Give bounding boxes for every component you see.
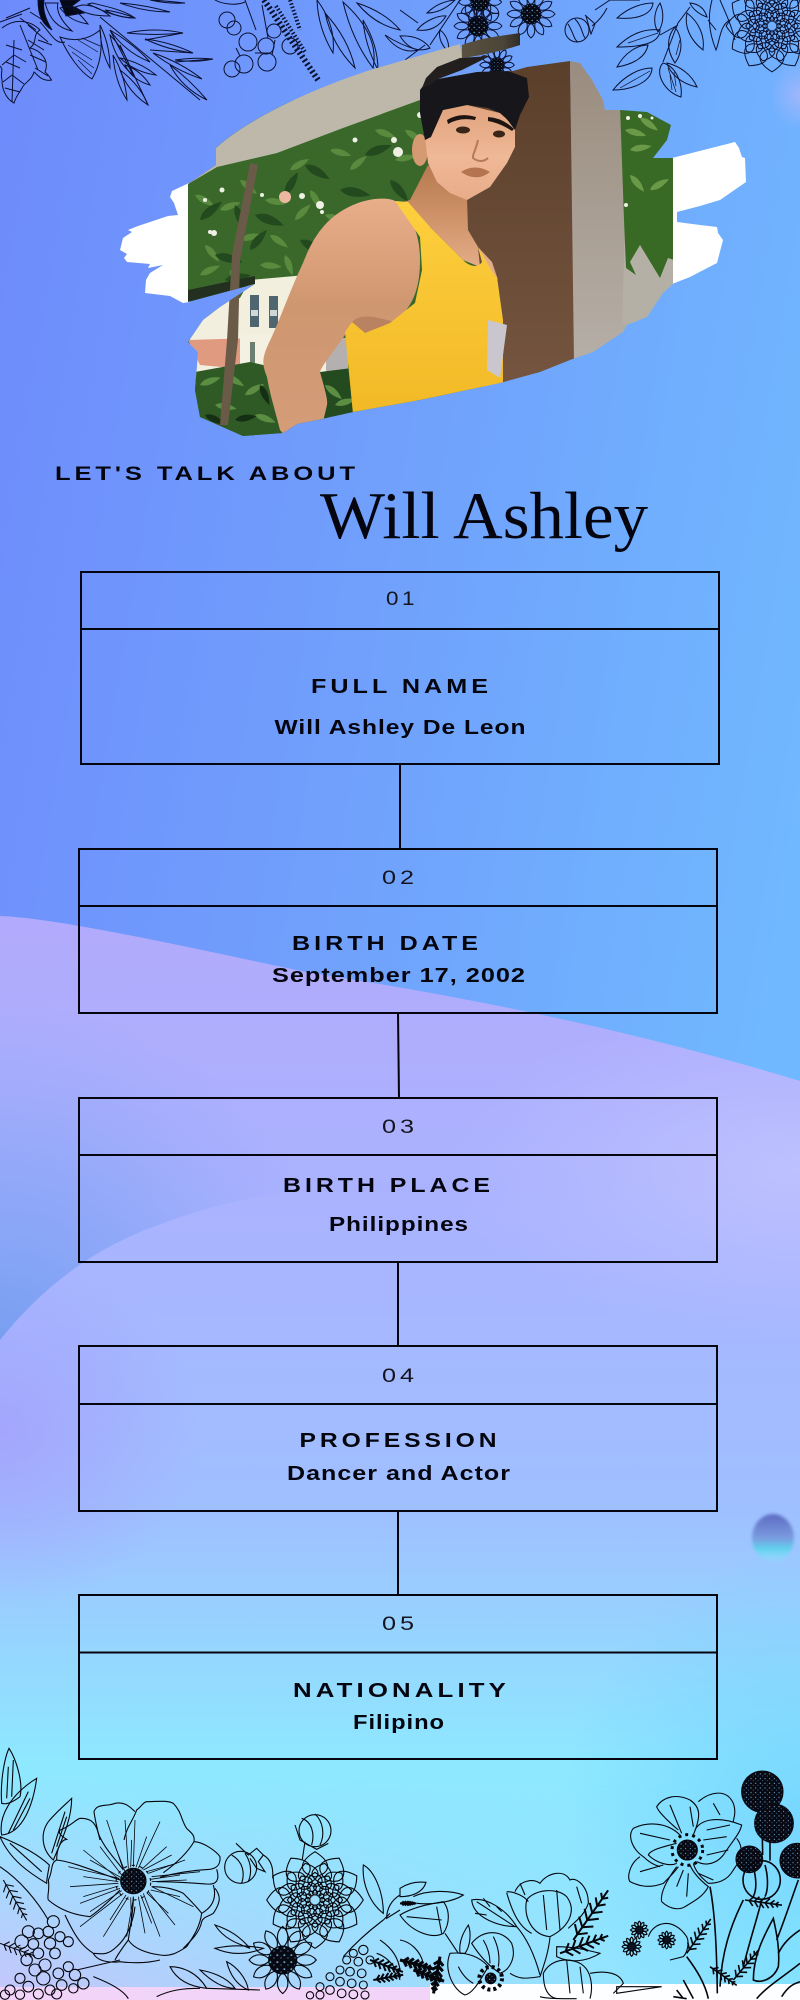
- large anemone flower: [48, 1801, 220, 1963]
- foliage background: [185, 100, 485, 440]
- connector 4: [397, 1511, 399, 1595]
- lobed leaves: [399, 1882, 540, 1994]
- concrete ledge: [188, 38, 470, 184]
- man: yellow tank top: [345, 201, 507, 414]
- left buds and leaves: [0, 1748, 72, 1961]
- middle leaves and sunflowers: [317, 0, 555, 82]
- centre dahlia: [267, 1852, 363, 1948]
- number 02: 02: [382, 868, 418, 889]
- number 05: 05: [382, 1614, 418, 1635]
- small buds: [225, 1814, 331, 1883]
- bottom floral left half: [0, 1748, 405, 1999]
- title: Will Ashley: Will Ashley: [320, 479, 649, 553]
- value full name: Will Ashley De Leon: [274, 717, 526, 739]
- label full name: FULL NAME: [311, 676, 492, 698]
- berries: [215, 0, 318, 80]
- portrait photo in brush stroke: [120, 33, 746, 440]
- heading: let's talk about: LET'S TALK ABOUT: [55, 463, 359, 485]
- value nationality: Filipino: [353, 1712, 445, 1734]
- building: [188, 272, 348, 380]
- panel 4: profession: [79, 1346, 717, 1511]
- value profession: Dancer and Actor: [287, 1463, 511, 1485]
- panel 5: nationality: [79, 1595, 717, 1759]
- top floral line art: [0, 0, 800, 105]
- protea and narrow leaves, top left: [38, 0, 213, 105]
- dahlia top right: [708, 0, 800, 72]
- pompom flowers: [736, 1771, 800, 1878]
- connector 1: [399, 764, 401, 849]
- panel 3: birth place: [79, 1098, 717, 1262]
- white brush strokes: [120, 142, 746, 303]
- lower flower: [448, 1925, 540, 1995]
- panel 2: birth date: [79, 849, 717, 1013]
- panel 1: full name: [81, 572, 719, 764]
- number 01: 01: [386, 589, 418, 610]
- photo content clipped to brush: [185, 38, 680, 440]
- right branch leaves: [613, 3, 707, 97]
- label nationality: NATIONALITY: [293, 1680, 510, 1702]
- bottom floral right half: [399, 1771, 800, 1999]
- label birth place: BIRTH PLACE: [283, 1175, 494, 1197]
- label profession: PROFESSION: [300, 1430, 500, 1452]
- man: neck: [396, 165, 480, 267]
- stems and tall bud: [673, 1837, 800, 1999]
- tulip: [507, 1873, 588, 1977]
- connector 2: [398, 1013, 399, 1098]
- brown pillar: [467, 61, 575, 384]
- tree trunk: [220, 163, 258, 425]
- number 03: 03: [382, 1117, 418, 1138]
- grey pillar: [570, 60, 628, 362]
- right anemone flower: [629, 1793, 742, 1909]
- right foliage panel: [620, 110, 673, 324]
- value birth place: Philippines: [329, 1214, 469, 1236]
- label birth date: BIRTH DATE: [292, 933, 482, 955]
- hair curl: [422, 56, 490, 88]
- tall fern and small blossoms: [540, 1885, 688, 1999]
- connector 3: [397, 1262, 399, 1346]
- bottom colour strip: [0, 1984, 800, 2000]
- number 04: 04: [382, 1366, 418, 1387]
- man: hair: [420, 68, 529, 140]
- leaves, sunflower and foreground: [157, 1865, 405, 1999]
- man: arm and torso: [263, 199, 420, 436]
- dark tape: [462, 33, 520, 58]
- fern, top left: [0, 8, 65, 103]
- water droplet: [752, 1514, 794, 1562]
- man: head: [412, 105, 515, 200]
- value birth date: September 17, 2002: [272, 965, 526, 987]
- berry cluster: [0, 1916, 128, 1999]
- bud: [565, 0, 640, 42]
- lower foliage: [195, 362, 360, 440]
